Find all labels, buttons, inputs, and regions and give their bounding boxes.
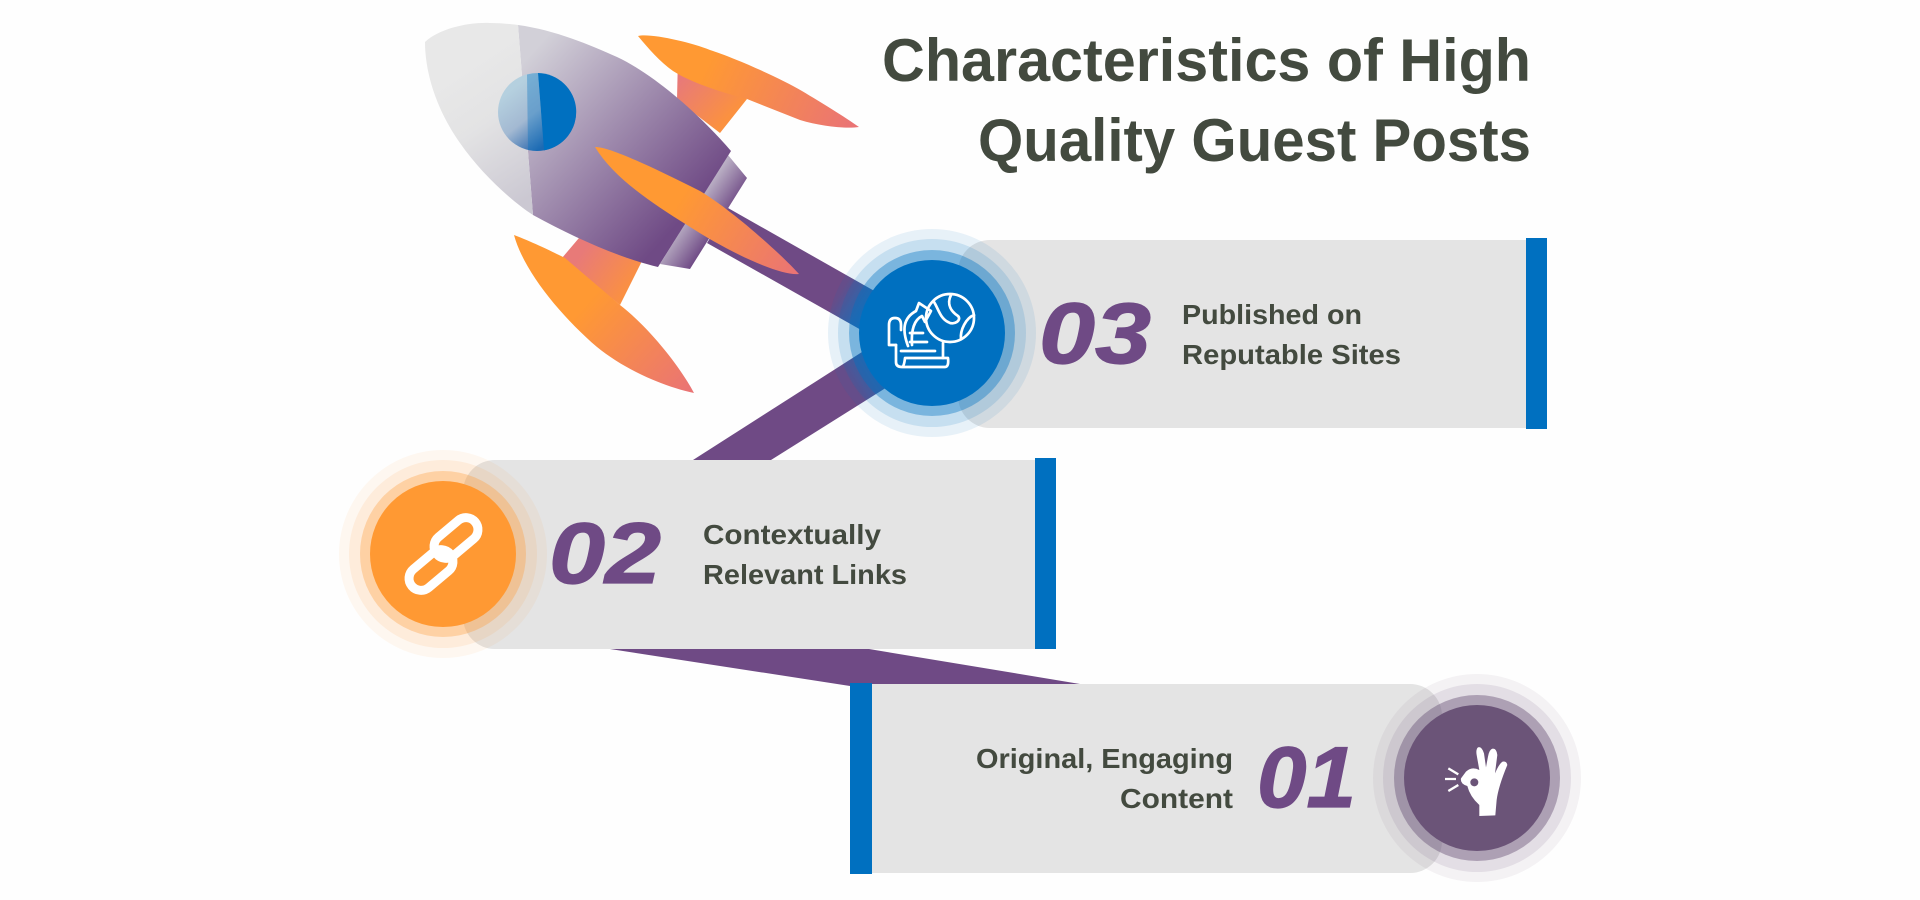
panel: step 3	[958, 238, 1547, 429]
upper fin strut	[677, 55, 747, 133]
step 1 background	[860, 684, 1442, 873]
connector: step 2 to step 1	[610, 649, 1080, 686]
icon: ok hand	[1445, 747, 1507, 816]
step 2 background	[463, 460, 1040, 649]
rocket nose	[425, 23, 533, 215]
step 3 background	[958, 240, 1530, 428]
panel: step 2	[463, 458, 1056, 649]
step 2 icon badge	[339, 450, 547, 658]
lower fin	[514, 235, 694, 393]
icon: chain link	[404, 513, 483, 595]
step 3 icon badge	[828, 229, 1036, 437]
step 1 icon badge	[1373, 674, 1581, 882]
lower fin strut	[562, 225, 650, 305]
rocket illustration	[425, 23, 859, 393]
title: Characteristics of High	[882, 27, 1531, 94]
step 1 label: Content	[1120, 783, 1233, 814]
step 3 accent bar	[1526, 238, 1547, 429]
step 3 label: Published on	[1182, 299, 1362, 330]
connector: step 3 to step 2	[693, 352, 892, 460]
step 2 label: Contextually	[703, 519, 881, 550]
title: Quality Guest Posts	[978, 107, 1531, 174]
nozzle	[660, 155, 747, 269]
middle fin	[595, 147, 799, 274]
step 3 number: 03	[1039, 286, 1151, 382]
step 2 number: 02	[549, 506, 661, 602]
step 1 accent bar	[850, 683, 872, 874]
panel: step 1	[850, 683, 1442, 874]
step 1 number: 01	[1257, 730, 1356, 826]
rocket body	[518, 25, 731, 267]
connector: rocket exhaust to step 3	[707, 208, 885, 335]
icon: document and globe	[889, 294, 974, 367]
step 2 accent bar	[1035, 458, 1056, 649]
step 1 label: Original, Engaging	[976, 743, 1233, 774]
step 2 label: Relevant Links	[703, 559, 907, 590]
porthole window	[498, 73, 576, 151]
step 3 label: Reputable Sites	[1182, 339, 1401, 370]
upper fin	[638, 35, 859, 128]
